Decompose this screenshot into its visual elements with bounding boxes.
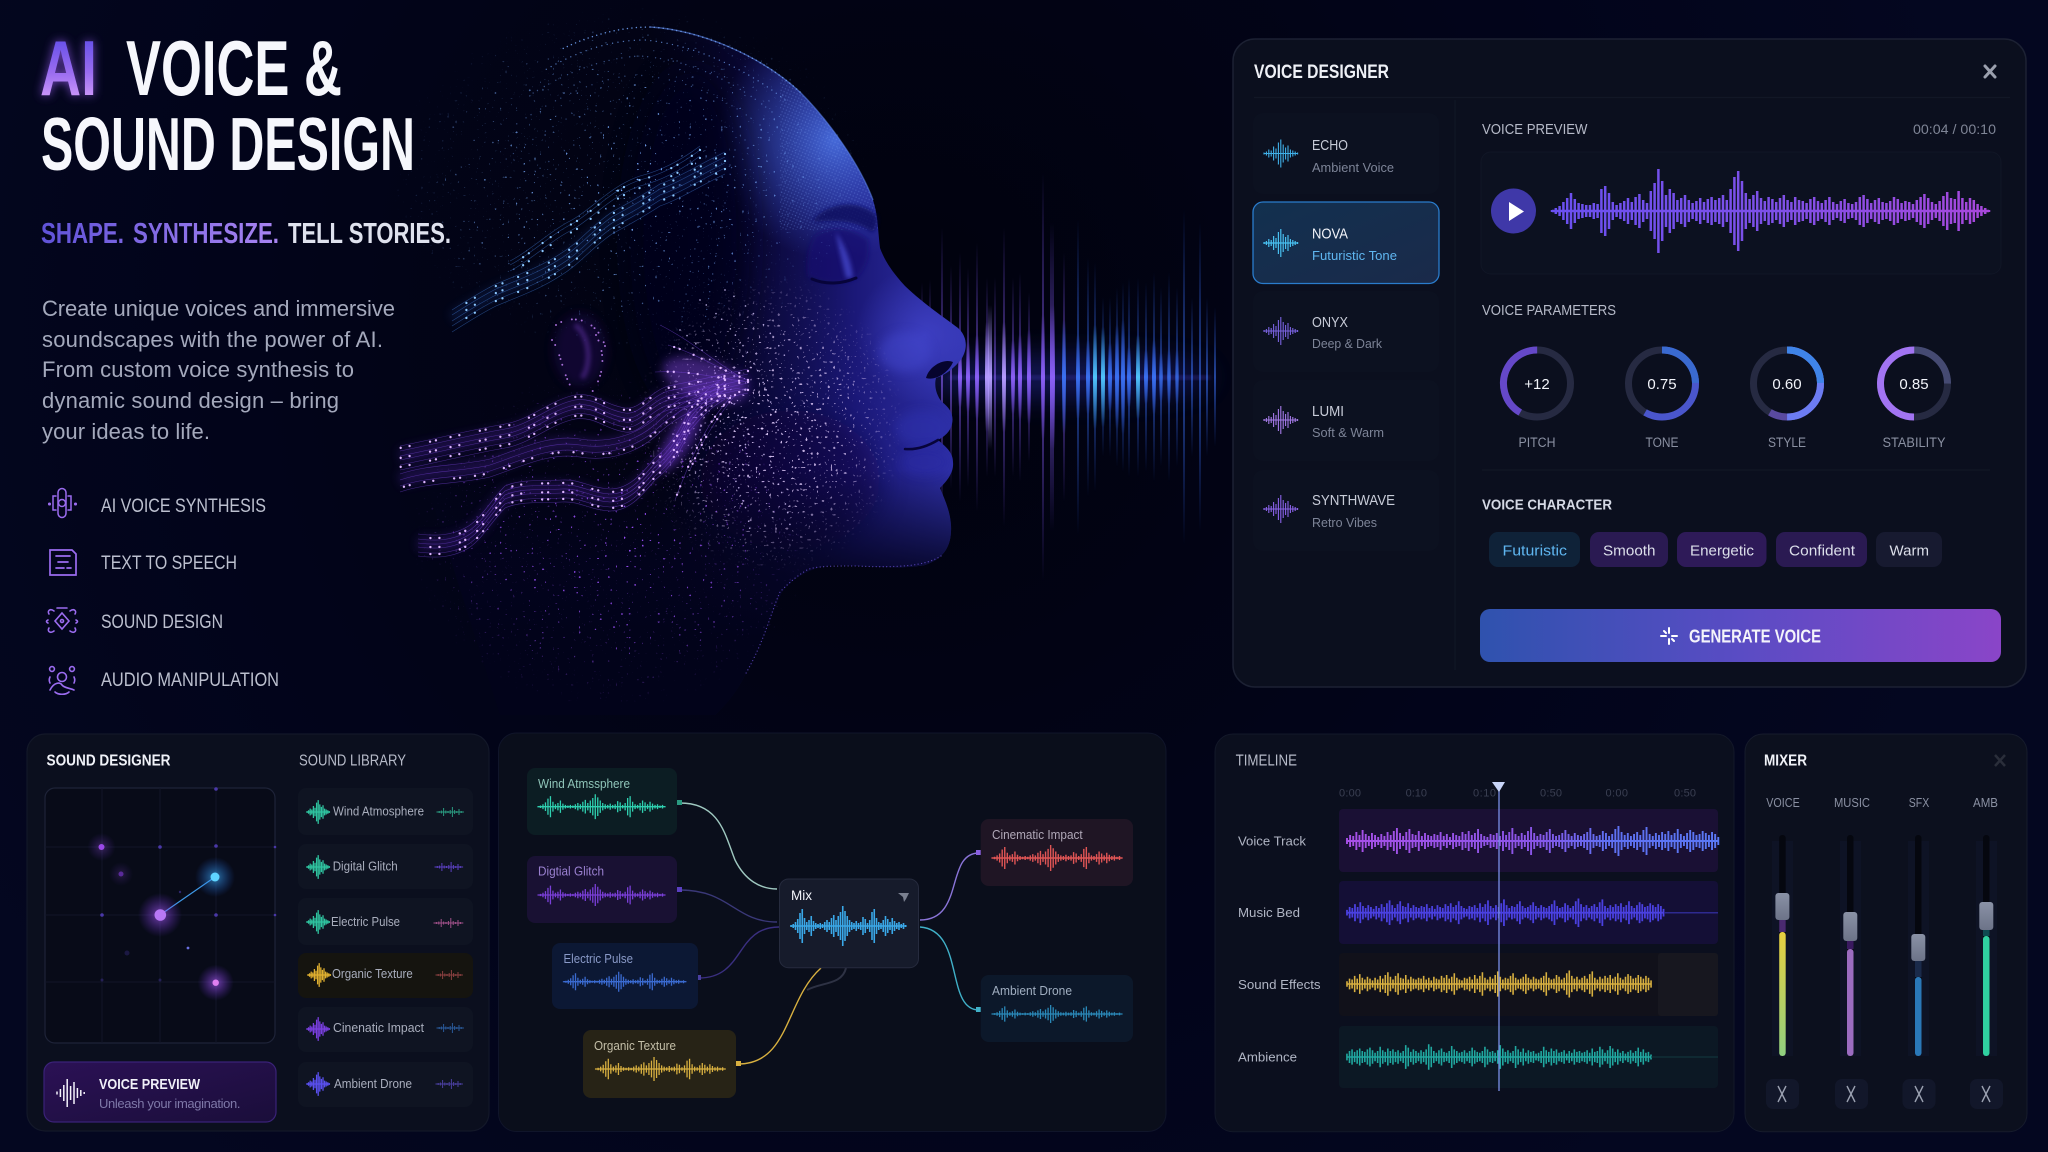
track: Ambience: Ambience xyxy=(1238,1050,1297,1065)
subtitle tagline: TELL STORIES. xyxy=(288,218,451,250)
XY sound pad xyxy=(45,787,276,1043)
feature: sound design: SOUND DESIGN xyxy=(101,612,223,633)
track: Voice Track: Voice Track xyxy=(1238,834,1306,849)
row: Electric Pulse: Electric Pulse xyxy=(331,914,400,929)
link between voice nodes xyxy=(160,877,215,915)
row: Digital Glitch: Digital Glitch xyxy=(333,859,398,874)
intro paragraph: soundscapes with the power of AI. xyxy=(42,327,383,352)
voice card: Nova (selected): Futuristic Tone xyxy=(1312,249,1397,263)
track: Voice Track xyxy=(1238,809,1718,872)
sound wave leaving the mouth xyxy=(910,172,1216,582)
voice character section: VOICE CHARACTER xyxy=(1482,496,1612,514)
time ruler: 0:10 xyxy=(1406,788,1427,800)
voice card: Echo xyxy=(1253,113,1439,194)
chip: Energetic: Energetic xyxy=(1690,544,1754,560)
fine skin grain and shading of the face xyxy=(644,34,966,696)
knob: pitch xyxy=(1491,338,1583,450)
magenta node xyxy=(198,965,234,1001)
chip: Confident xyxy=(1776,532,1867,567)
voice card: Synthwave: SYNTHWAVE xyxy=(1312,493,1395,509)
time ruler: 0:50 xyxy=(1674,788,1696,800)
channel: voice xyxy=(1766,796,1800,1109)
chip: Smooth xyxy=(1590,532,1668,567)
feature: audio manipulation: AUDIO MANIPULATION xyxy=(101,670,279,691)
voice character section xyxy=(1482,496,1942,567)
subtitle tagline: SYNTHESIZE. xyxy=(133,218,279,250)
icon: audio manipulation xyxy=(49,667,75,694)
generate voice button xyxy=(1480,609,2001,662)
row: Ambient Drone xyxy=(298,1062,473,1107)
connection lines xyxy=(677,800,981,1066)
panel: timeline xyxy=(1215,734,1734,1132)
chip: Futuristic: Futuristic xyxy=(1502,544,1567,560)
row: Ambient Drone: Ambient Drone xyxy=(334,1076,412,1091)
node: Organic Texture: Organic Texture xyxy=(594,1038,676,1053)
node: Ambient Drone xyxy=(981,975,1133,1042)
voice card: Echo: ECHO xyxy=(1312,138,1348,154)
dim close icon xyxy=(1995,755,2005,766)
chip: Smooth: Smooth xyxy=(1603,544,1656,560)
subtitle tagline: SHAPE. xyxy=(41,218,124,250)
voice card: Echo: Ambient Voice xyxy=(1312,161,1394,175)
channel: sfx: SFX xyxy=(1909,796,1930,810)
heading: sound designer: SOUND DESIGNER xyxy=(46,753,170,770)
main title: SOUND DESIGN xyxy=(41,102,415,186)
knob: stability: STABILITY xyxy=(1882,435,1946,450)
time ruler: 0:00 xyxy=(1606,788,1628,800)
track: Ambience xyxy=(1238,1026,1718,1088)
dotted cheek arcs xyxy=(680,290,810,530)
row: Wind Atmosphere: Wind Atmosphere xyxy=(333,804,424,819)
track: Sound Effects: Sound Effects xyxy=(1238,977,1321,992)
node: Wind Atmssphere: Wind Atmssphere xyxy=(538,776,630,791)
node: Organic Texture xyxy=(583,1030,736,1098)
knob: style: 0.60 xyxy=(1772,376,1802,393)
intro paragraph xyxy=(42,296,395,444)
node: Mix xyxy=(780,879,918,968)
voice card: Nova (selected) xyxy=(1253,202,1439,284)
knob: style xyxy=(1754,350,1820,450)
knob: tone: 0.75 xyxy=(1647,376,1677,393)
intro paragraph: From custom voice synthesis to xyxy=(42,357,354,382)
node: Electric Pulse xyxy=(552,943,698,1009)
knob: stability: 0.85 xyxy=(1899,376,1929,393)
voice preview section xyxy=(1481,121,2001,274)
row: Electric Pulse xyxy=(298,898,473,945)
knob: tone xyxy=(1628,350,1696,450)
node: Digtial Glitch xyxy=(527,856,677,923)
voice card: Onyx: Deep & Dark xyxy=(1312,337,1383,351)
time ruler xyxy=(1339,788,1696,800)
icon: AI voice synthesis xyxy=(49,488,76,518)
panel: sound designer and library xyxy=(27,734,489,1131)
heading: mixer: MIXER xyxy=(1764,753,1807,770)
chip: Energetic xyxy=(1677,532,1766,567)
voice card: Lumi: LUMI xyxy=(1312,404,1344,420)
purple node: main xyxy=(138,893,182,937)
purple node: top left xyxy=(88,833,116,861)
chip: Confident: Confident xyxy=(1789,544,1855,560)
icon: sparkle xyxy=(1661,628,1677,644)
generate voice button: GENERATE VOICE xyxy=(1689,626,1821,646)
flowing purple and blue strands xyxy=(400,146,753,557)
time ruler: 0:10 xyxy=(1473,788,1496,800)
voice card: Synthwave xyxy=(1253,470,1439,551)
illustration: particle face in profile xyxy=(396,9,966,702)
title accent AI with glow: AI xyxy=(40,24,97,112)
knob: stability xyxy=(1880,350,1948,450)
channel: music: MUSIC xyxy=(1834,796,1870,810)
dim node xyxy=(109,862,133,886)
knob: style: STYLE xyxy=(1768,435,1806,450)
track: Music Bed: Music Bed xyxy=(1238,905,1300,920)
preview waveform xyxy=(1552,169,1989,253)
row: Cinenatic Impact: Cinenatic Impact xyxy=(333,1020,424,1035)
dark ear swirl xyxy=(552,314,606,392)
voice preview section: VOICE PREVIEW xyxy=(1482,121,1588,138)
voice preview card: VOICE PREVIEW xyxy=(99,1076,201,1093)
track: Sound Effects xyxy=(1238,953,1718,1016)
bright core bars xyxy=(958,305,1179,449)
main title xyxy=(40,24,415,186)
voice list xyxy=(1253,113,1439,551)
node: Cinematic Impact: Cinematic Impact xyxy=(992,827,1083,842)
panel: node graph xyxy=(498,733,1166,1132)
intro paragraph: Create unique voices and immersive xyxy=(42,296,395,321)
voice parameters section xyxy=(1482,302,1948,450)
row: Wind Atmosphere xyxy=(298,788,473,835)
node: Cinematic Impact xyxy=(981,819,1133,886)
intro paragraph: dynamic sound design – bring xyxy=(42,388,339,413)
close icon xyxy=(1985,66,1995,77)
title accent AI with glow: AI xyxy=(40,24,97,112)
main title: VOICE & xyxy=(126,24,342,112)
node: Ambient Drone: Ambient Drone xyxy=(992,983,1072,998)
feature list xyxy=(46,488,279,694)
subtitle tagline xyxy=(41,218,451,250)
row: Organic Texture: Organic Texture xyxy=(332,966,413,981)
voice card: Onyx: ONYX xyxy=(1312,315,1348,331)
knob: pitch: +12 xyxy=(1524,376,1550,393)
panel: mixer xyxy=(1745,734,2027,1132)
voice preview card xyxy=(44,1062,276,1122)
facial features: brow, eye, nostril, lips xyxy=(650,27,953,675)
node: Digtial Glitch: Digtial Glitch xyxy=(538,864,604,879)
playhead xyxy=(1492,782,1505,1091)
node: Electric Pulse: Electric Pulse xyxy=(564,951,633,966)
panel heading: VOICE DESIGNER xyxy=(1254,62,1389,83)
channel: amb xyxy=(1970,796,2003,1109)
icon: white waveform xyxy=(57,1079,84,1107)
row: Digital Glitch xyxy=(298,844,473,889)
icon: sound design xyxy=(46,608,78,632)
voice parameters section: VOICE PARAMETERS xyxy=(1482,302,1616,319)
track: Music Bed xyxy=(1238,881,1718,944)
voice card: Lumi xyxy=(1253,380,1439,461)
feature: text to speech: TEXT TO SPEECH xyxy=(101,553,237,574)
node: Mix: Mix xyxy=(791,888,812,903)
voice preview card: Unleash your imagination. xyxy=(99,1096,240,1111)
channel: amb: AMB xyxy=(1973,796,1998,810)
heading: timeline: TIMELINE xyxy=(1236,753,1297,770)
scattered particles: crown, cheek, neck xyxy=(397,9,901,702)
sound library list xyxy=(298,788,473,1107)
knob: tone: TONE xyxy=(1646,435,1678,450)
intro paragraph: your ideas to life. xyxy=(42,419,210,444)
channel: voice: VOICE xyxy=(1766,796,1800,810)
voice card: Nova (selected): NOVA xyxy=(1312,226,1348,242)
voice card: Synthwave: Retro Vibes xyxy=(1312,516,1377,530)
panel: voice designer xyxy=(1233,39,2026,687)
glow band xyxy=(910,357,1210,397)
channel: music xyxy=(1834,796,1870,1109)
node: Wind Atmssphere xyxy=(527,768,677,835)
voice card: Lumi: Soft & Warm xyxy=(1312,426,1384,440)
knob: pitch: PITCH xyxy=(1518,435,1556,450)
time ruler: 0:00 xyxy=(1339,788,1361,800)
row: Cinenatic Impact xyxy=(298,1007,473,1052)
feature: AI voice synthesis: AI VOICE SYNTHESIS xyxy=(101,496,266,517)
chip: Warm xyxy=(1876,532,1942,567)
cyan node xyxy=(195,857,235,897)
row: Organic Texture xyxy=(298,953,473,998)
channel: sfx xyxy=(1902,796,1936,1109)
icon: text to speech xyxy=(50,550,76,575)
chip: Warm: Warm xyxy=(1890,544,1929,560)
time ruler: 0:50 xyxy=(1540,788,1562,800)
voice preview section: 00:04 / 00:10 xyxy=(1913,121,1996,137)
play button xyxy=(1491,188,1536,234)
heading: sound library: SOUND LIBRARY xyxy=(299,753,406,770)
voice card: Onyx xyxy=(1253,291,1439,372)
tall faint bars xyxy=(913,172,1216,582)
crown particle arcs xyxy=(500,27,800,330)
chip: Futuristic xyxy=(1489,532,1580,567)
